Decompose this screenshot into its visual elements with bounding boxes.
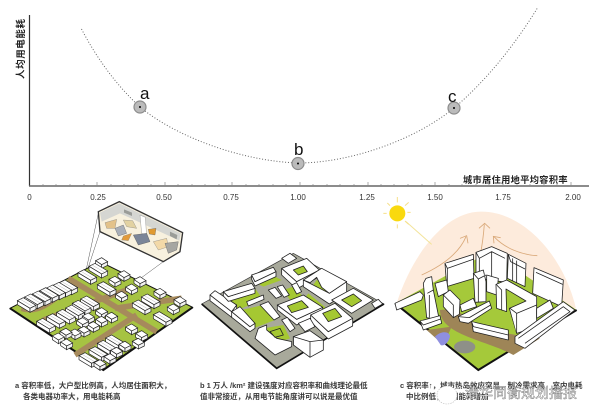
caption a: a 容积率低，大户型比例高，人均居住面积大， bbox=[15, 380, 171, 390]
x tick labels: 0.50 bbox=[156, 193, 172, 202]
chart: density vs energy curve bbox=[15, 7, 589, 202]
towers bbox=[395, 247, 575, 348]
plaza bbox=[454, 341, 475, 353]
apartment interior cutaway bbox=[98, 202, 183, 262]
x tick labels bbox=[27, 193, 581, 202]
panel b: medium density courtyard blocks bbox=[202, 253, 384, 368]
caption b: 值非常接近，从用电节能角度讲可以说是最优值 bbox=[200, 391, 358, 401]
ground heavy edge bbox=[395, 303, 577, 370]
x tick labels: 1.25 bbox=[359, 193, 375, 202]
caption b bbox=[200, 380, 368, 401]
point b bbox=[292, 140, 304, 170]
ground bbox=[10, 262, 193, 370]
icon: watermark bubble bbox=[437, 386, 457, 404]
sunlight ray bbox=[406, 222, 432, 244]
watermark: 清华同衡规划播报 bbox=[465, 385, 577, 401]
point a: a bbox=[140, 84, 150, 103]
ground heavy edge bbox=[202, 304, 384, 368]
green spaces bbox=[227, 277, 333, 345]
caption a bbox=[15, 380, 171, 401]
x axis minor ticks bbox=[43, 182, 571, 186]
caption c: c 容积率↑，城市热岛效应突显，制冷需求高，室内电耗 bbox=[400, 380, 583, 390]
paths bbox=[440, 308, 540, 355]
watermark bbox=[437, 385, 577, 404]
caption c: 中比例低，空调能耗增加 bbox=[406, 391, 488, 401]
point a bbox=[134, 84, 150, 113]
x tick labels: 1.75 bbox=[495, 193, 511, 202]
point b: b bbox=[294, 140, 303, 159]
caption c bbox=[400, 380, 583, 401]
caption b: b 1 万人 /km² 建设强度对应容积率和曲线理论最低 bbox=[200, 380, 368, 390]
ground bbox=[395, 252, 577, 370]
x tick labels: 1.50 bbox=[427, 193, 443, 202]
point c bbox=[448, 87, 460, 114]
x axis bbox=[29, 185, 589, 187]
x tick labels: 0 bbox=[27, 193, 32, 202]
courtyard buildings bbox=[210, 253, 383, 357]
icon: sun bbox=[383, 197, 411, 228]
x axis title: 城市居住用地平均容积率 bbox=[463, 174, 568, 185]
houses bbox=[17, 258, 186, 370]
panel a: low density houses bbox=[10, 202, 193, 370]
ground heavy edge bbox=[10, 307, 193, 370]
heat flow arrows bbox=[422, 223, 537, 278]
x tick labels: 0.75 bbox=[223, 193, 239, 202]
y axis title: 人均用电能耗 bbox=[15, 18, 27, 79]
x tick labels: 0.25 bbox=[90, 193, 106, 202]
caption a: 各类电器功率大，用电能耗高 bbox=[23, 391, 121, 401]
panel c: high density towers with heat dome bbox=[383, 197, 577, 370]
x tick labels: 2.00 bbox=[565, 193, 581, 202]
callout lines bbox=[86, 213, 163, 280]
pond bbox=[435, 332, 450, 345]
heat island dome bbox=[397, 212, 576, 308]
x tick labels: 1.00 bbox=[290, 193, 306, 202]
dotted energy curve bbox=[82, 7, 538, 163]
roads bbox=[22, 278, 182, 355]
ground bbox=[202, 253, 384, 368]
point c: c bbox=[448, 87, 457, 106]
y axis bbox=[28, 15, 30, 186]
